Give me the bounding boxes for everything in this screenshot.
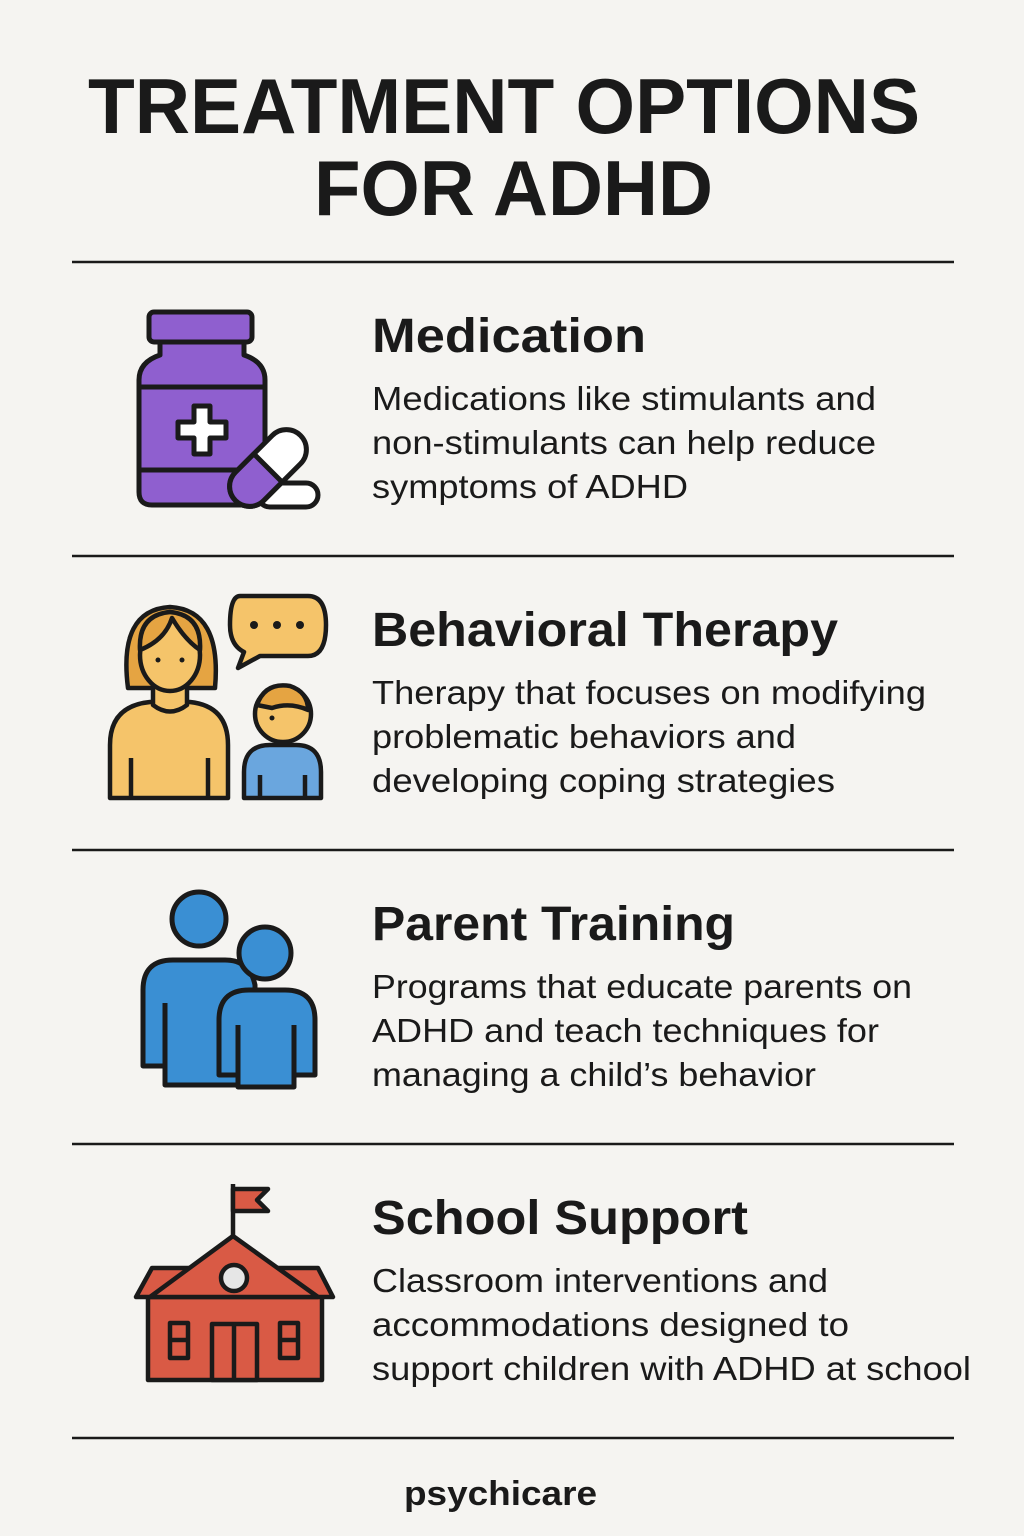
heading: medication: Medication [372,310,646,363]
text: behavioral therapy: problematic behaviors and [372,718,796,755]
text: school support [372,1262,971,1387]
text: medication [372,380,876,505]
text: school support: accommodations designed to [372,1306,849,1343]
icon: school [136,1184,333,1380]
text: school support: support children with ADHD at school [372,1350,971,1387]
icon: medicine bottle [139,312,318,515]
text: parent training: Programs that educate parents on [372,968,912,1005]
text: medication: symptoms of ADHD [372,468,688,505]
heading: parent training: Parent Training [372,898,735,951]
text: parent training: ADHD and teach techniques for [372,1012,879,1049]
text: parent training: managing a child’s behavior [372,1056,816,1093]
title: FOR ADHD [314,144,713,232]
title: TREATMENT OPTIONS [88,62,920,150]
text: medication: non-stimulants can help reduce [372,424,876,461]
text: school support: Classroom interventions and [372,1262,828,1299]
text: behavioral therapy: developing coping strategies [372,762,835,799]
icon: parent and child [143,892,315,1087]
title [88,62,920,232]
heading: behavioral therapy: Behavioral Therapy [372,604,838,657]
text: parent training [372,968,912,1093]
text: behavioral therapy [372,674,926,799]
text: behavioral therapy: Therapy that focuses on modifying [372,674,926,711]
heading: school support: School Support [372,1192,748,1245]
footer brand: psychicare [404,1475,597,1513]
icon: parent and child talking [110,596,326,798]
text: medication: Medications like stimulants and [372,380,876,417]
